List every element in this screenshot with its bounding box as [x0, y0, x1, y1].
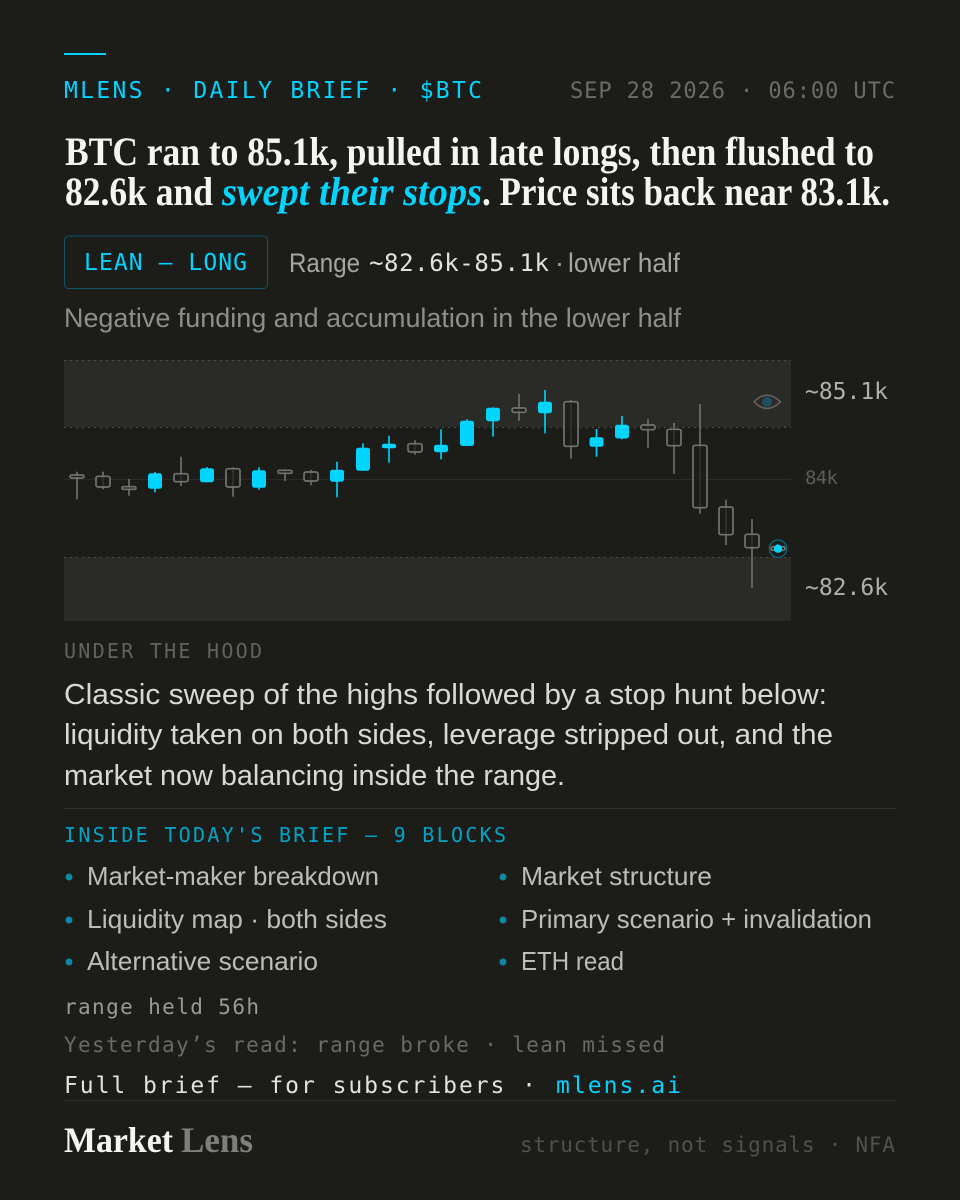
range summary: Range — [289, 248, 360, 278]
range summary: lower half — [568, 248, 680, 278]
headline: BTC ran to 85.1k, pulled in late longs, then flushed to — [65, 129, 874, 174]
upper liquidity band — [64, 360, 791, 427]
under the hood heading: UNDER THE HOOD — [64, 639, 262, 663]
footer wordmark: Market — [64, 1120, 173, 1160]
brief contents list: Primary scenario + invalidation — [521, 904, 872, 934]
accent rule — [64, 53, 106, 55]
current price marker — [769, 540, 787, 557]
candlestick chart — [64, 360, 791, 621]
footer tagline: structure, not signals · NFA — [520, 1133, 895, 1157]
range summary: ~82.6k-85.1k — [369, 249, 550, 277]
brand kicker: MLENS · DAILY BRIEF · $BTC — [64, 78, 482, 104]
lean badge — [64, 236, 268, 288]
brief contents list: Liquidity map · both sides — [87, 904, 387, 934]
lean badge: LEAN — LONG — [84, 250, 247, 276]
range held note: range held 56h — [64, 995, 259, 1019]
headline: 82.6k and — [65, 169, 213, 214]
brief contents list: Market structure — [521, 861, 712, 891]
under the hood paragraph — [64, 679, 833, 792]
headline: swept their stops — [221, 169, 482, 214]
brief contents heading: INSIDE TODAY'S BRIEF — 9 BLOCKS — [64, 823, 506, 847]
footer wordmark: Lens — [181, 1120, 253, 1160]
price axis labels: 84k — [805, 467, 839, 489]
call to action: mlens.ai — [556, 1073, 681, 1099]
under the hood paragraph: market now balancing inside the range. — [64, 760, 565, 792]
headline: . Price sits back near 83.1k. — [482, 169, 890, 214]
lower liquidity band — [64, 557, 791, 621]
footer wordmark — [64, 1120, 253, 1160]
range summary: · — [555, 248, 564, 278]
brief contents list — [66, 861, 872, 976]
price axis labels: ~85.1k — [805, 379, 888, 405]
yesterday's read: Yesterday’s read: range broke · lean missed — [64, 1033, 665, 1057]
under the hood paragraph: Classic sweep of the highs followed by a stop hunt below: — [64, 679, 827, 711]
brief contents list: Alternative scenario — [87, 946, 318, 976]
candles — [70, 390, 785, 588]
subhead: Negative funding and accumulation in the lower half — [64, 303, 681, 333]
brief contents list: ETH read — [521, 946, 624, 976]
under the hood paragraph: liquidity taken on both sides, leverage stripped out, and the — [64, 719, 833, 751]
price axis labels — [805, 379, 888, 601]
headline — [65, 129, 890, 214]
call to action: Full brief — for subscribers · — [64, 1073, 536, 1099]
price axis labels: ~82.6k — [805, 575, 888, 601]
icon: eye — [754, 395, 780, 408]
date stamp: SEP 28 2026 · 06:00 UTC — [570, 79, 895, 104]
brief contents list: Market-maker breakdown — [87, 861, 379, 891]
header row — [64, 78, 895, 104]
range summary — [289, 248, 680, 278]
